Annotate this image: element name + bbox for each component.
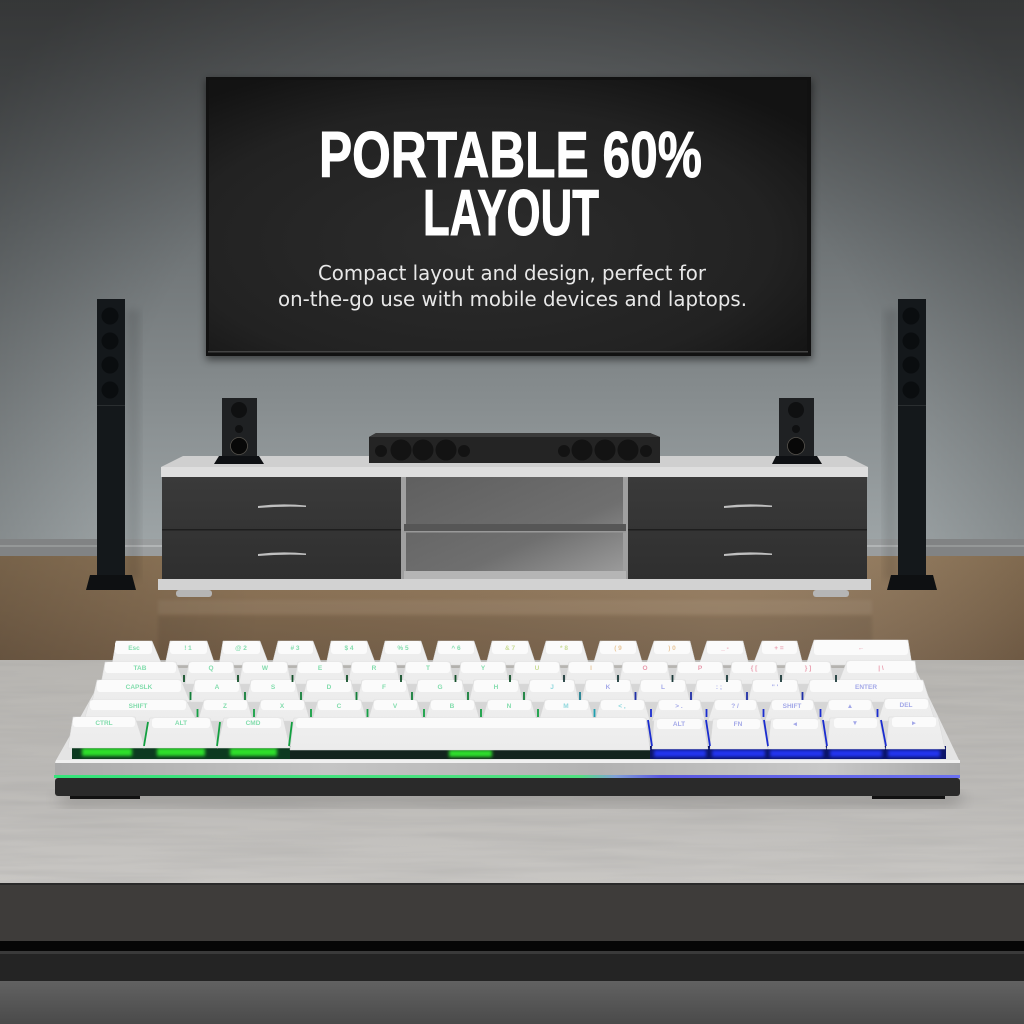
wall [0,0,1024,560]
key legends: O [642,665,648,672]
key legends: ^ 6 [451,644,461,652]
key legends: I [590,665,592,672]
key legends: E [318,665,323,672]
key legends: CMD [246,720,261,727]
keyboard shadow [60,794,960,804]
key row 3 [92,680,930,702]
key legends: > . [675,703,683,710]
heading: LAYOUT [423,176,599,249]
lit gaps between keys [144,675,886,746]
key row 1 [112,640,912,665]
key legends: Esc [128,645,140,652]
key legends: V [393,703,398,710]
right drawers [628,477,867,579]
heading: PORTABLE 60% [319,118,702,191]
key legends: { [ [751,665,758,672]
description text [278,261,747,311]
key legends: SHIFT [129,703,147,710]
key legends: + = [774,645,784,652]
left drawers [162,477,401,579]
key legends: W [262,665,269,672]
key legends: @ 2 [235,645,247,652]
key legends: U [535,665,540,672]
key legends: _ - [720,645,729,652]
key legends: ← [858,645,864,652]
wall-mounted TV panel [206,77,812,360]
right tower speaker [884,299,937,590]
wooden floor [0,556,1024,662]
key legends: % 5 [397,645,409,652]
description text: Compact layout and design, perfect for [318,261,707,285]
key legends: SHIFT [783,703,801,710]
key legends: # 3 [290,645,300,652]
key legends: X [280,703,285,710]
key legends: ENTER [855,684,877,691]
key legends: ALT [175,720,187,727]
key legends: TAB [134,665,147,672]
key legends: $ 4 [344,645,354,652]
description text: on-the-go use with mobile devices and laptops. [278,287,747,311]
key legends: & 7 [505,645,515,652]
key legends: CTRL [95,720,113,727]
key legends: Z [223,703,227,710]
soundbar [369,433,660,463]
concrete table top [0,660,1024,883]
key legends: | \ [878,665,884,672]
TV console [158,456,871,597]
key legends: J [550,684,554,691]
key legends: P [698,665,703,672]
key legends: ► [911,720,917,727]
left tower speaker [86,299,140,590]
key legends: ) 0 [668,645,676,652]
key legends: C [337,703,342,710]
key legends: ! 1 [184,645,192,652]
right bookshelf speaker [772,398,822,464]
table front edge [0,883,1024,1024]
key legends: " ' [772,684,779,691]
key legends: S [271,684,276,691]
left bookshelf speaker [214,398,264,464]
key legends: DEL [900,702,913,709]
key legends: K [606,684,611,691]
key legends: D [327,684,332,691]
key legends: : ; [716,684,722,691]
under-key glow [72,746,946,759]
key legends: Q [208,665,214,672]
key legends: R [372,665,377,672]
heading [319,118,702,249]
key legends: N [507,703,512,710]
key legends: ? / [731,703,739,710]
key legends [95,644,917,728]
console top slab [161,456,868,477]
key legends: < , [618,703,626,710]
keyboard [54,640,960,804]
key row 4 [84,699,935,721]
console base and feet [158,579,871,597]
key legends: B [450,703,455,710]
RGB light strip [54,775,960,778]
key legends: Y [481,665,486,672]
keyboard case [55,668,960,799]
key legends: * 8 [560,645,568,652]
key legends: ALT [673,721,685,728]
key legends: } ] [805,665,811,672]
key legends: L [661,684,665,691]
key legends: ▲ [847,703,853,710]
key legends: ▼ [852,720,858,727]
key legends: M [563,703,569,710]
key legends: ◄ [792,721,798,728]
key legends: G [437,684,443,691]
key legends: H [494,684,499,691]
open centre shelf [401,477,628,579]
baseboard [0,539,1024,556]
key row 2 [101,661,918,684]
key legends: F [382,684,386,691]
key legends: ( 9 [614,645,622,652]
key legends: T [426,665,430,672]
key legends: A [215,684,220,691]
key legends: CAPSLK [126,684,153,691]
key row 5 and space bar [68,717,945,750]
key legends: FN [734,721,743,728]
